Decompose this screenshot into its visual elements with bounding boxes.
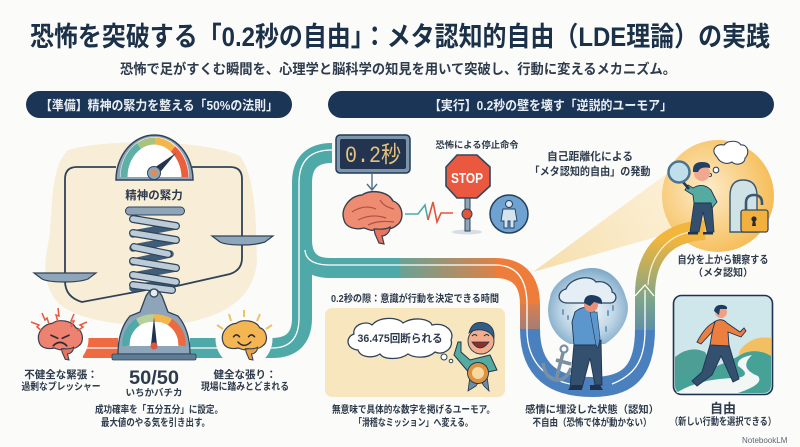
text: buried emotions caption <box>525 403 659 429</box>
landscape <box>675 349 730 378</box>
stop label: 恐怖による停止命令 <box>436 139 518 150</box>
top gauge <box>116 135 193 180</box>
text: fifty percent description: 最大値のやる気を引き出す。 <box>101 416 210 429</box>
label: healthy tension: 現場に踏みとどまれる <box>201 380 289 393</box>
spotlight circle <box>662 140 774 252</box>
magnifier <box>668 162 690 189</box>
cream backdrop blob <box>45 142 257 325</box>
label: unhealthy tension <box>22 368 100 393</box>
watermark: NotebookLM <box>742 436 788 445</box>
subtitle: 恐怖で足がすくむ瞬間を、心理学と脳科学の知見を用いて突破し、行動に変えるメカニズム。 <box>120 61 676 77</box>
text: self distancing: 自己距離化による <box>547 149 633 163</box>
gloomy cloud halo <box>548 268 628 344</box>
stat: 50/50: いちかバチカ <box>125 388 183 399</box>
bottom fulcrum gauge <box>112 289 196 360</box>
thought bubble <box>708 141 748 176</box>
stat: 50/50 <box>125 368 183 399</box>
heading pill: preparation <box>26 91 292 118</box>
icon: glow rays <box>217 310 272 329</box>
icon: stop sign: STOP <box>451 170 483 187</box>
heading pill: preparation: 【準備】精神の緊力を整える「50%の法則」 <box>40 98 278 113</box>
heading pill: execution <box>328 91 774 118</box>
stat: 50/50: 50/50 <box>129 368 179 389</box>
icon: stress sparks <box>31 308 87 331</box>
timer: 0.2 seconds <box>336 135 410 173</box>
runner <box>692 305 746 386</box>
text: humor description: 無意味で具体的な数字を掲げるユーモア。 <box>332 403 495 416</box>
timer: 0.2 seconds: 0.2秒 <box>345 142 401 169</box>
sad person <box>568 295 603 390</box>
icon: healthy brain <box>216 310 272 368</box>
medal <box>468 376 489 391</box>
panel: humor mission <box>325 308 505 397</box>
gauge label: 精神の緊力 <box>125 188 183 202</box>
icon: brain <box>343 192 402 244</box>
flow pipe: teal, orange, blue, yellow route <box>83 150 705 387</box>
picture card: running to freedom <box>674 296 772 394</box>
text: metacognition caption: （メタ認知） <box>693 266 753 279</box>
label: unhealthy tension: 過剰なプレッシャー <box>22 380 100 393</box>
rain drops <box>563 306 613 331</box>
icon: frozen person <box>490 195 528 233</box>
text: buried emotions caption: 不自由（恐怖で体が動かない） <box>532 416 652 429</box>
text: self distancing <box>530 149 651 178</box>
anchor <box>543 346 571 380</box>
spring <box>126 207 184 290</box>
meta-cognition figures <box>668 141 768 234</box>
observer figure <box>685 162 717 234</box>
text: metacognition caption <box>678 253 768 279</box>
left pan <box>34 273 96 282</box>
text: fifty percent description: 成功確率を「五分五分」に設定。 <box>95 403 223 416</box>
text: gap heading: 0.2秒の隙：意識が行動を決定できる時間 <box>331 292 499 305</box>
text: humor description: 「滑稽なミッション」へ変える。 <box>354 416 473 429</box>
door and padlock <box>730 180 768 232</box>
text: humor description <box>332 403 495 429</box>
arrow: timer to brain <box>367 173 377 190</box>
freedom caption: 自由 <box>710 401 736 416</box>
text: buried emotions caption: 感情に埋没した状態（認知） <box>525 403 659 416</box>
rain cloud <box>559 278 616 303</box>
freedom caption <box>670 401 776 428</box>
icon: stop sign <box>446 155 490 234</box>
speech cloud: 36.475回断られる <box>358 331 442 345</box>
label: healthy tension <box>201 368 289 393</box>
right pan <box>212 236 273 245</box>
balance frame <box>65 167 242 302</box>
text: self distancing: 「メタ認知的自由」の発動 <box>530 164 651 178</box>
text: fifty percent description <box>95 403 223 429</box>
text: metacognition caption: 自分を上から観察する <box>678 253 768 266</box>
speech cloud <box>348 318 453 363</box>
pulse line <box>405 202 453 222</box>
freedom caption: （新しい行動を選択できる） <box>670 415 776 428</box>
laughing man <box>454 322 497 391</box>
label: healthy tension: 健全な張り： <box>214 368 276 381</box>
light beam <box>533 175 695 272</box>
label: unhealthy tension: 不健全な緊張： <box>24 368 98 381</box>
heading pill: execution: 【実行】0.2秒の壁を壊す「逆説的ユーモア」 <box>429 98 672 113</box>
icon: stressed brain <box>32 310 88 368</box>
